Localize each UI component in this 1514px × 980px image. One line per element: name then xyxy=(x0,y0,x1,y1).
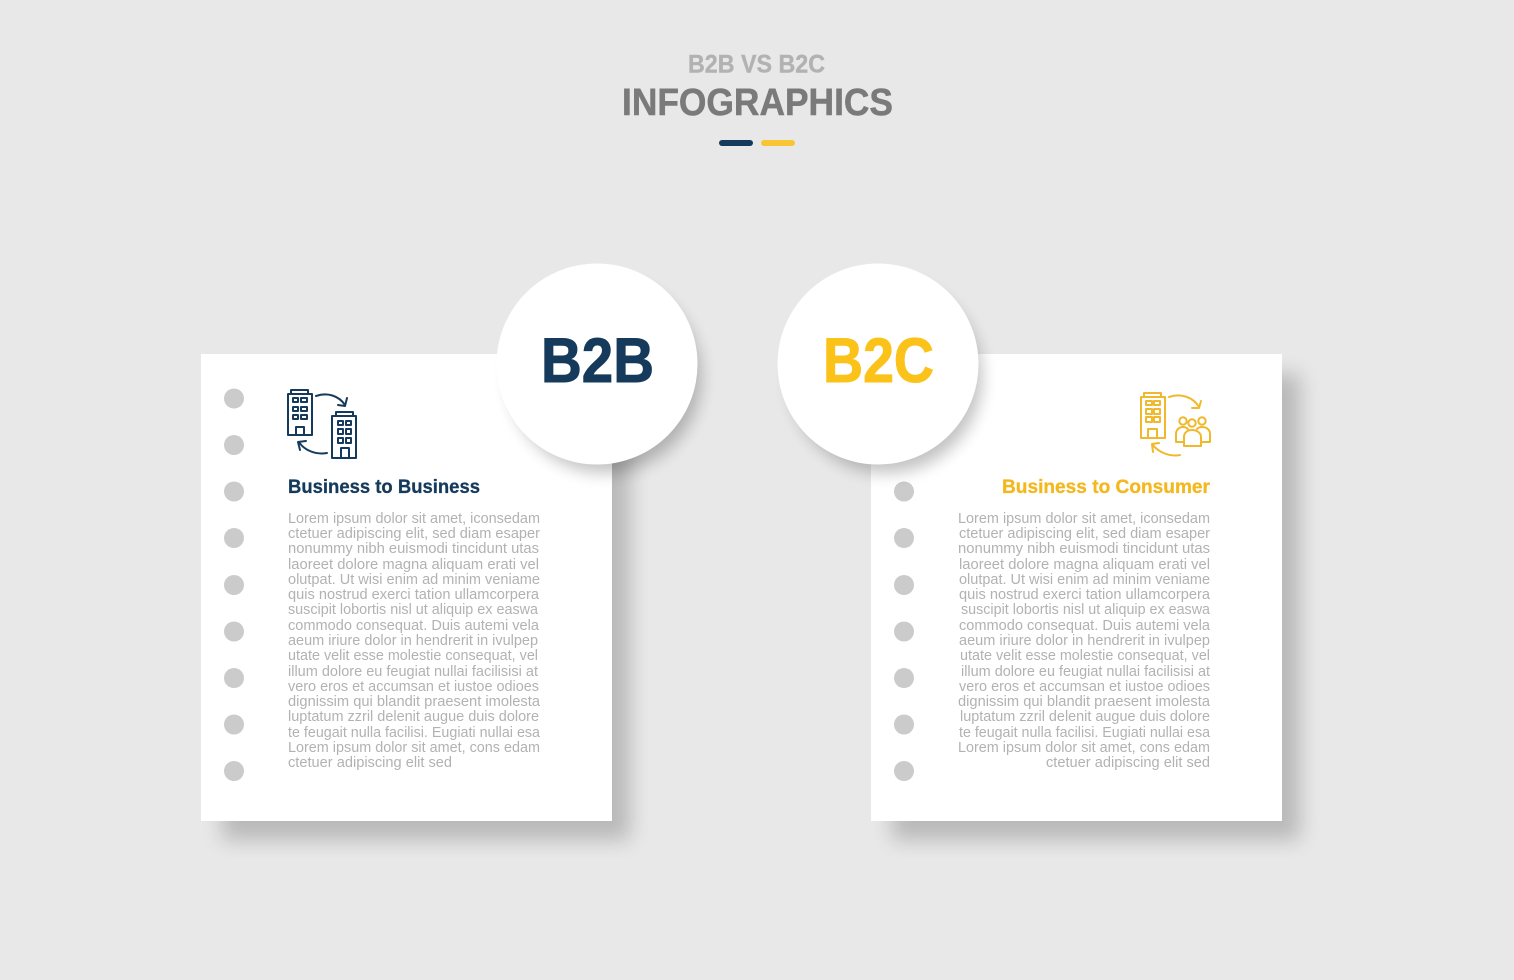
panel: B2C xyxy=(871,354,1300,840)
body text left: olutpat. Ut wisi enim ad minim veniame xyxy=(288,572,540,588)
subtitle: B2B VS B2C xyxy=(688,50,825,78)
body text right xyxy=(958,511,1211,771)
body text left: aeum iriure dolor in hendrerit in ivulpep xyxy=(288,633,538,649)
heading: Business to Business: Business to Business xyxy=(288,476,480,498)
badge: B2C circle: B2C xyxy=(823,326,934,396)
body text right: suscipit lobortis nisl ut aliquip ex easwa xyxy=(961,602,1211,618)
badge: B2B circle xyxy=(496,264,701,473)
body text right: quis nostrud exerci tation ullamcorpera xyxy=(959,587,1211,603)
body text right: aeum iriure dolor in hendrerit in ivulpep xyxy=(959,633,1210,649)
body text left: utate velit esse molestie consequat, vel xyxy=(288,648,538,664)
body text right: olutpat. Ut wisi enim ad minim veniame xyxy=(959,572,1210,588)
body text left: ctetuer adipiscing elit sed xyxy=(288,755,452,771)
body text left: luptatum zzril delenit augue duis dolore xyxy=(288,709,539,725)
heading: Business to Consumer: Business to Consumer xyxy=(1002,476,1210,498)
body text right: laoreet dolore magna aliquam erati vel xyxy=(959,557,1210,573)
body text left: commodo consequat. Duis autemi vela xyxy=(288,618,540,634)
icon: two buildings exchange xyxy=(288,390,356,458)
body text right: Lorem ipsum dolor sit amet, iconsedam xyxy=(958,511,1210,527)
body text right: ctetuer adipiscing elit sed xyxy=(1046,755,1210,771)
body text right: utate velit esse molestie consequat, vel xyxy=(960,648,1210,664)
binder holes right xyxy=(894,482,914,781)
body text left: suscipit lobortis nisl ut aliquip ex easwa xyxy=(288,602,539,618)
body text left: vero eros et accumsan et iustoe odioes xyxy=(288,679,539,695)
badge: B2C circle xyxy=(778,264,982,473)
body text right: dignissim qui blandit praesent imolesta xyxy=(958,694,1211,710)
body text left: laoreet dolore magna aliquam erati vel xyxy=(288,557,539,573)
body text left: Lorem ipsum dolor sit amet, iconsedam xyxy=(288,511,540,527)
body text left: dignissim qui blandit praesent imolesta xyxy=(288,694,541,710)
body text left: illum dolore eu feugiat nullai facilisisi at xyxy=(288,664,538,680)
binder holes left xyxy=(224,388,244,781)
body text left: nonummy nibh euismodi tincidunt utas xyxy=(288,541,539,557)
main title: INFOGRAPHICS xyxy=(622,82,893,124)
body text right: ctetuer adipiscing elit, sed diam esaper xyxy=(959,526,1210,542)
title block xyxy=(622,50,893,146)
panel: B2B xyxy=(201,354,630,840)
body text right: nonummy nibh euismodi tincidunt utas xyxy=(958,541,1210,557)
body text right: commodo consequat. Duis autemi vela xyxy=(959,618,1211,634)
body text right: Lorem ipsum dolor sit amet, cons edam xyxy=(958,740,1210,756)
body text right: vero eros et accumsan et iustoe odioes xyxy=(959,679,1210,695)
body text left: ctetuer adipiscing elit, sed diam esaper xyxy=(288,526,540,542)
badge: B2B circle: B2B xyxy=(541,326,654,396)
body text right: te feugait nulla facilisi. Eugiati nullai esa xyxy=(959,725,1211,741)
body text left: te feugait nulla facilisi. Eugiati nullai esa xyxy=(288,725,541,741)
body text left xyxy=(288,511,541,771)
body text right: illum dolore eu feugiat nullai facilisisi at xyxy=(961,664,1210,680)
body text left: quis nostrud exerci tation ullamcorpera xyxy=(288,587,540,603)
icon: building and consumers exchange xyxy=(1141,393,1210,455)
title accent bars xyxy=(719,140,795,146)
body text right: luptatum zzril delenit augue duis dolore xyxy=(960,709,1210,725)
body text left: Lorem ipsum dolor sit amet, cons edam xyxy=(288,740,540,756)
